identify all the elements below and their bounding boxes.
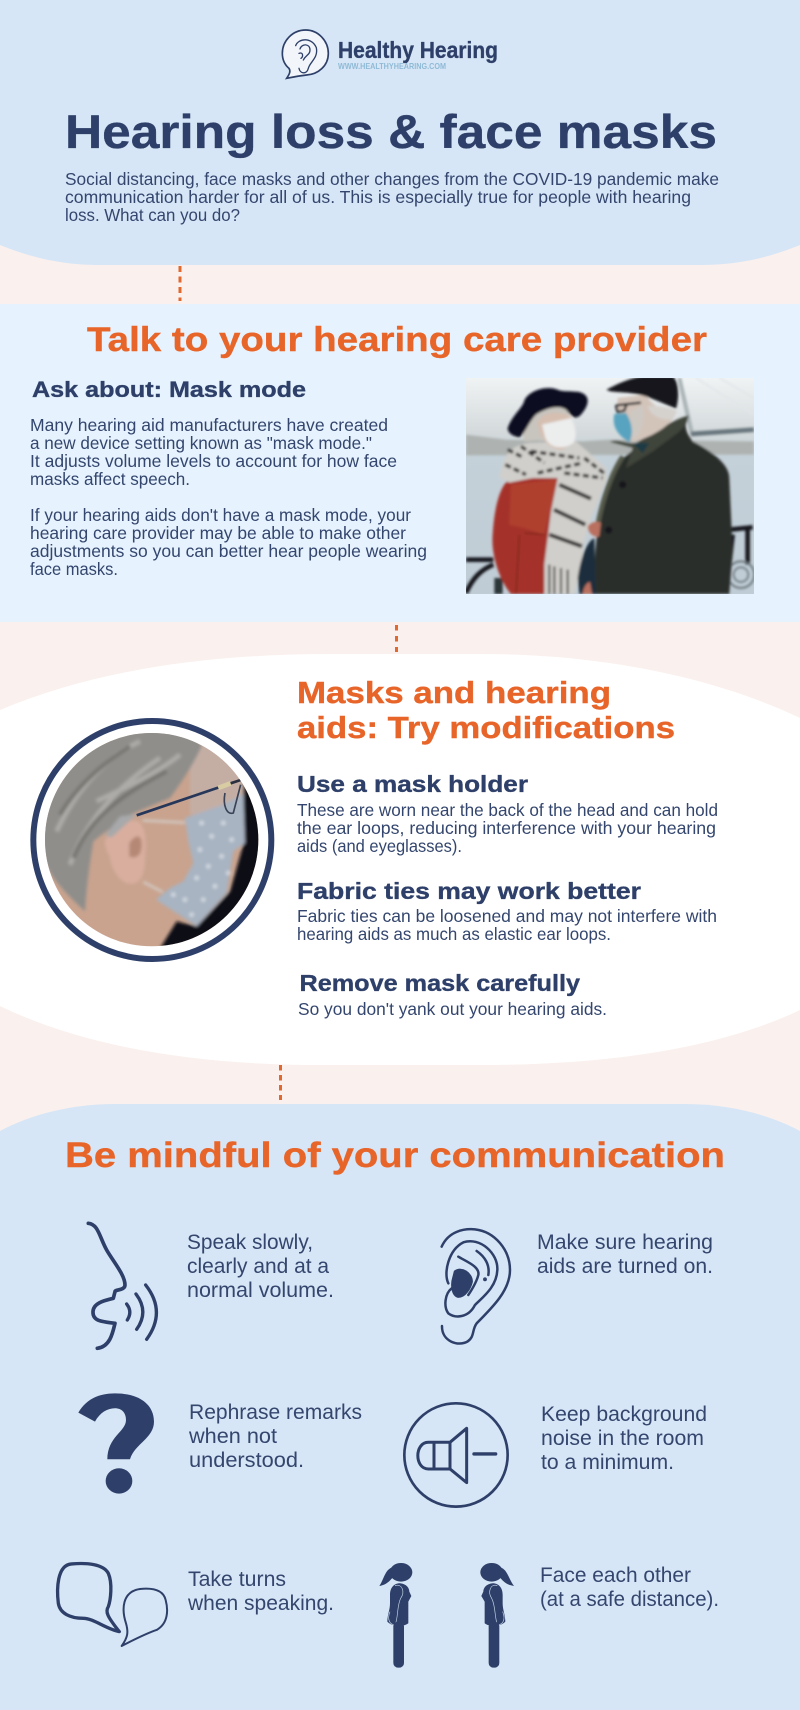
icon: right person	[480, 1563, 514, 1668]
text: hearing aids on	[537, 1230, 713, 1278]
intro text	[65, 169, 719, 225]
heading: talk to your provider: Talk to your hearing care provider	[87, 321, 707, 359]
tip: use a mask holder: the ear loops, reducing interference with your hearing	[297, 818, 716, 838]
text: mask mode explanation: If your hearing aids don't have a mask mode, your	[30, 505, 411, 525]
tip: remove mask carefully: So you don't yank out your hearing aids.	[298, 999, 607, 1019]
man coat	[594, 416, 733, 594]
tip: remove mask carefully: Remove mask carefully	[300, 970, 580, 996]
text: face each other: Face each other	[540, 1563, 691, 1587]
text: take turns	[187, 1567, 334, 1615]
text: take turns: Take turns	[188, 1567, 286, 1591]
tip: use a mask holder: These are worn near the back of the head and can hold	[297, 800, 718, 820]
text: background noise	[541, 1402, 707, 1474]
panel: be mindful of your communication	[0, 1104, 800, 1710]
tip: fabric ties: Fabric ties may work better	[297, 878, 641, 904]
text: mask mode explanation: hearing care provider may be able to make other	[30, 523, 406, 543]
scarf	[499, 441, 607, 594]
text: speak slowly: clearly and at a	[187, 1254, 329, 1278]
icon: face speaking	[88, 1223, 156, 1348]
text: mask mode explanation: a new device setting known as "mask mode."	[30, 433, 372, 453]
logo: Healthy Hearing	[282, 30, 498, 78]
text: mask mode explanation: masks affect speech.	[30, 469, 190, 489]
heading: masks and hearing aids	[297, 676, 675, 745]
photo: older couple in masks	[466, 376, 754, 594]
tip: background noise	[404, 1402, 707, 1507]
text: background noise: to a minimum.	[541, 1450, 674, 1474]
text: mask mode explanation	[30, 415, 427, 579]
intro text: communication harder for all of us. This is especially true for people with hearing	[65, 187, 691, 207]
intro text: Social distancing, face masks and other changes from the COVID-19 pandemic make	[65, 169, 719, 189]
logo: Healthy Hearing: Healthy Hearing	[338, 37, 498, 63]
icon: speech bubbles	[58, 1564, 167, 1646]
tip: speak slowly	[88, 1223, 334, 1348]
text: hearing aids on: Make sure hearing	[537, 1230, 713, 1254]
tip: remove mask carefully	[298, 970, 607, 1019]
text: rephrase: understood.	[189, 1448, 304, 1472]
text: speak slowly: normal volume.	[187, 1278, 334, 1302]
heading: masks and hearing aids: Masks and hearing	[297, 676, 611, 710]
text: mask mode explanation: It adjusts volume levels to account for how face	[30, 451, 397, 471]
tip: rephrase	[78, 1393, 362, 1494]
woman head	[523, 406, 569, 441]
man head	[617, 395, 677, 442]
title: Hearing loss & face masks	[65, 105, 717, 158]
text: rephrase: Rephrase remarks	[189, 1400, 362, 1424]
tip: fabric ties: hearing aids as much as elastic ear loops.	[297, 924, 611, 944]
text: face each other: (at a safe distance).	[540, 1587, 719, 1611]
text: rephrase: when not	[188, 1424, 277, 1448]
text: speak slowly	[187, 1230, 334, 1302]
heading: masks and hearing aids: aids: Try modifications	[297, 711, 675, 745]
photo: mask behind ear	[33, 721, 271, 959]
text: rephrase	[188, 1400, 362, 1472]
icon: two people facing	[379, 1563, 514, 1668]
panel: header	[0, 0, 800, 265]
text: background noise: noise in the room	[541, 1426, 704, 1450]
heading: be mindful: Be mindful of your communication	[65, 1136, 725, 1175]
intro text: loss. What can you do?	[65, 205, 240, 225]
woman coat	[492, 476, 558, 594]
text: face each other	[540, 1563, 719, 1611]
icon: left person	[379, 1563, 412, 1668]
text: mask mode explanation: adjustments so you can better hear people wearing	[30, 541, 427, 561]
tip: fabric ties	[297, 878, 717, 944]
tip: take turns	[58, 1564, 334, 1646]
tip: use a mask holder: Use a mask holder	[297, 771, 528, 797]
panel: masks and hearing aids	[0, 654, 800, 1065]
logo: Healthy Hearing: WWW.HEALTHYHEARING.COM	[338, 61, 446, 71]
tip: use a mask holder	[297, 771, 718, 856]
text: speak slowly: Speak slowly,	[187, 1230, 313, 1254]
text: take turns: when speaking.	[187, 1591, 334, 1615]
text: mask mode explanation: face masks.	[30, 559, 118, 579]
text: background noise: Keep background	[541, 1402, 707, 1426]
panel: talk to your hearing care provider	[0, 304, 800, 622]
text: hearing aids on: aids are turned on.	[537, 1254, 713, 1278]
icon: ear with hearing aid	[442, 1229, 510, 1344]
tip: hearing aids on	[442, 1229, 713, 1344]
icon: question mark	[78, 1393, 154, 1494]
tip: face each other	[379, 1563, 719, 1668]
icon: speaker in circle	[404, 1403, 508, 1507]
text: mask mode explanation: Many hearing aid manufacturers have created	[30, 415, 388, 435]
tip: use a mask holder: aids (and eyeglasses).	[297, 836, 462, 856]
tip: fabric ties: Fabric ties can be loosened and may not interfere with	[297, 906, 717, 926]
subheading: mask mode: Ask about: Mask mode	[32, 377, 306, 402]
